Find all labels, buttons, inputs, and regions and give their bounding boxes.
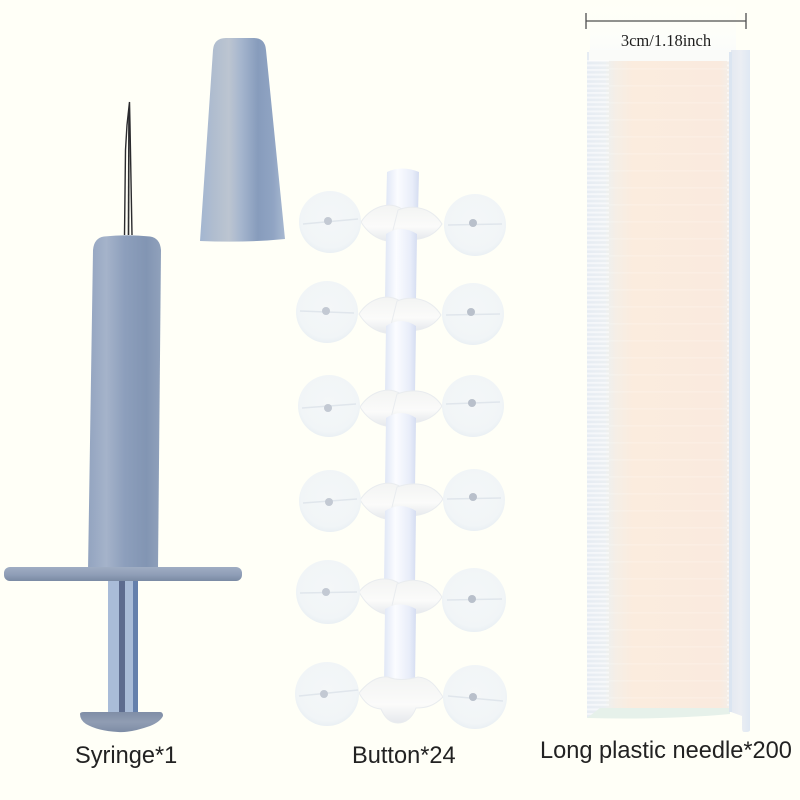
- long plastic needle pack: [587, 0, 750, 732]
- dimension marker: [586, 13, 746, 50]
- syringe cap: [200, 38, 285, 242]
- button row 3: [298, 375, 504, 488]
- button strip: [295, 168, 507, 729]
- button stem top: [386, 168, 419, 215]
- button row 1: [299, 191, 506, 300]
- label: syringe: Syringe*1: [75, 743, 177, 769]
- dimension text: 3cm/1.18inch: [621, 31, 712, 50]
- needle pack top bar: [589, 50, 731, 61]
- syringe plunger rods: [108, 580, 138, 713]
- needle pack left teeth: [587, 52, 621, 718]
- button row 4: [299, 469, 505, 585]
- label: long plastic needle: Long plastic needle*200: [540, 738, 792, 764]
- needle pack fine ribs: [587, 60, 738, 718]
- syringe barrel: [88, 235, 161, 570]
- ruler line: [586, 13, 746, 29]
- syringe plunger head: [80, 712, 163, 732]
- label: button: Button*24: [352, 743, 456, 769]
- button row 2: [296, 281, 504, 394]
- needle pack right rail: [731, 50, 750, 732]
- syringe: [4, 102, 242, 732]
- button row 5: [296, 560, 506, 684]
- needle pack peach body: [606, 58, 729, 708]
- button row 6: [295, 662, 507, 729]
- needle pack translucent top: [590, 0, 736, 52]
- needle pack bottom green edge: [587, 708, 730, 718]
- icon: steel needle: [124, 102, 132, 235]
- syringe finger flange: [4, 567, 242, 581]
